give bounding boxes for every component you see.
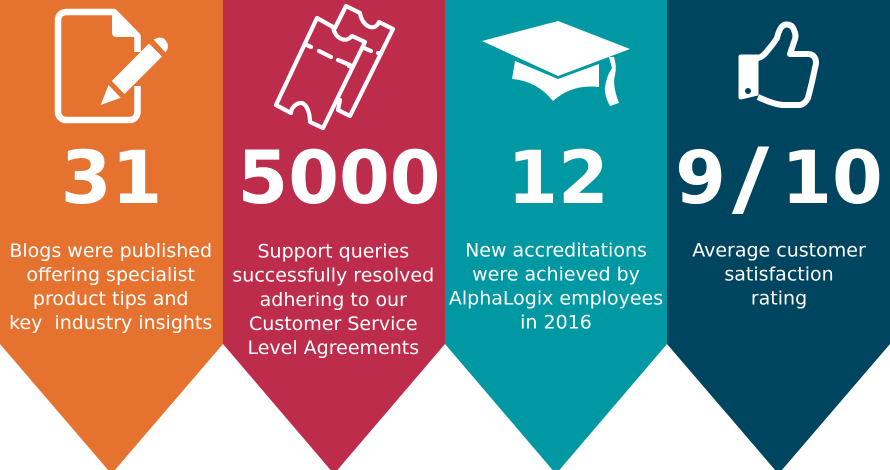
text: satisfaction description: Average customer: [692, 240, 866, 262]
text: support description: Level Agreements: [247, 337, 419, 359]
number: 12: 12: [507, 136, 609, 221]
text: accreditations description: in 2016: [520, 312, 592, 334]
icon: tickets: [276, 6, 393, 128]
number: 9/10: 9: [675, 136, 726, 221]
text: accreditations description: New accreditations: [465, 240, 647, 262]
text: satisfaction description: satisfaction: [724, 264, 834, 286]
icon: thumbs up: [739, 24, 816, 105]
text: support description: adhering to our: [260, 289, 407, 311]
number: 31: 31: [61, 136, 162, 221]
number: 9/10: /: [732, 130, 769, 226]
icon: graduation cap: [482, 21, 630, 106]
panel: satisfaction: [667, 0, 890, 470]
text: support description: successfully resolved: [232, 264, 434, 286]
number: 5000: 5000: [237, 136, 441, 221]
text: support description: Support queries: [257, 240, 409, 262]
text: satisfaction description: rating: [751, 288, 807, 310]
text: accreditations description: were achieved by: [472, 264, 640, 286]
icon: document and pencil: [58, 12, 168, 120]
text: blogs description: offering specialist: [26, 264, 195, 286]
text: blogs description: Blogs were published: [9, 240, 212, 262]
text: blogs description: product tips and: [33, 288, 188, 310]
number: 9/10: 10: [781, 136, 883, 221]
text: support description: Customer Service: [249, 313, 418, 335]
panel: accreditations: [445, 0, 667, 470]
text: blogs description: key industry insights: [9, 312, 212, 334]
panel: support queries: [223, 0, 445, 470]
text: accreditations description: AlphaLogix employees: [449, 288, 663, 310]
panel: blogs: [0, 0, 223, 470]
number: 9/10: [675, 130, 883, 226]
